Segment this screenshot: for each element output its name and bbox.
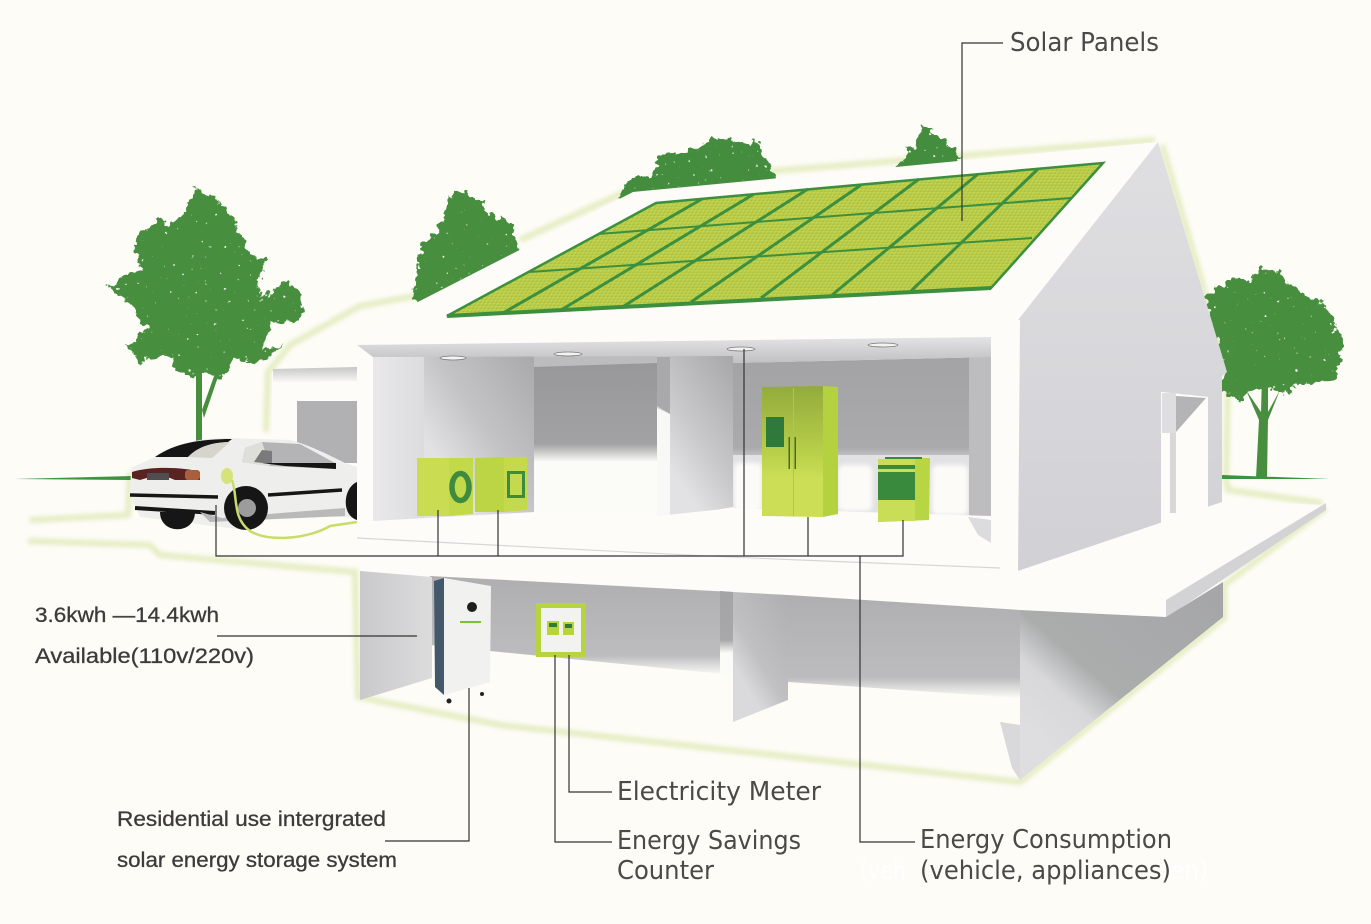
label: storage system [117, 808, 397, 872]
solar panels [447, 163, 1103, 316]
slab between floors [358, 502, 1326, 618]
house: annex with garage door [272, 366, 357, 470]
appliance: box with square [475, 457, 527, 512]
label: storage system: Residential use intergrated [117, 808, 386, 831]
green glow outline [28, 140, 1326, 782]
house: gable wall [1018, 142, 1227, 571]
label: energy consumption: (vehicle, appliances) [920, 856, 1171, 886]
label: capacity: 3.6kwh —14.4kwh [35, 604, 219, 627]
tree: left [110, 187, 303, 442]
car [130, 438, 357, 538]
basement walls [360, 571, 1223, 780]
ceiling lights [440, 343, 898, 360]
bushes behind ridge [620, 127, 962, 205]
appliance: fridge [762, 386, 838, 517]
meter frame [536, 603, 586, 657]
garage opening at right [1161, 392, 1208, 523]
label: availability: Available(110v/220v) [35, 645, 254, 668]
appliance: box with ring [417, 458, 473, 516]
label: energy consumption: en) [1170, 856, 1208, 886]
ground lines [14, 475, 1330, 480]
label: solar panels: Solar Panels [1010, 28, 1159, 58]
label: energy consumption [860, 825, 1208, 886]
label: energy consumption: (veh [860, 856, 906, 886]
label: energy savings counter: Energy Savings [617, 826, 801, 856]
label: energy savings counter: Counter [617, 856, 714, 886]
tree: right [1206, 268, 1343, 478]
house: roof [357, 142, 1158, 345]
label: energy consumption: Energy Consumption [920, 825, 1172, 855]
label: electricity meter: Electricity Meter [617, 777, 821, 807]
appliance: stove [878, 457, 930, 522]
label: storage system: solar energy storage system [117, 849, 397, 872]
tree: behind roof left [412, 190, 522, 310]
label: energy savings counter [617, 826, 801, 886]
connector lines [216, 43, 1003, 842]
battery cabinet [434, 578, 491, 704]
interior: ground floor [357, 320, 1020, 570]
